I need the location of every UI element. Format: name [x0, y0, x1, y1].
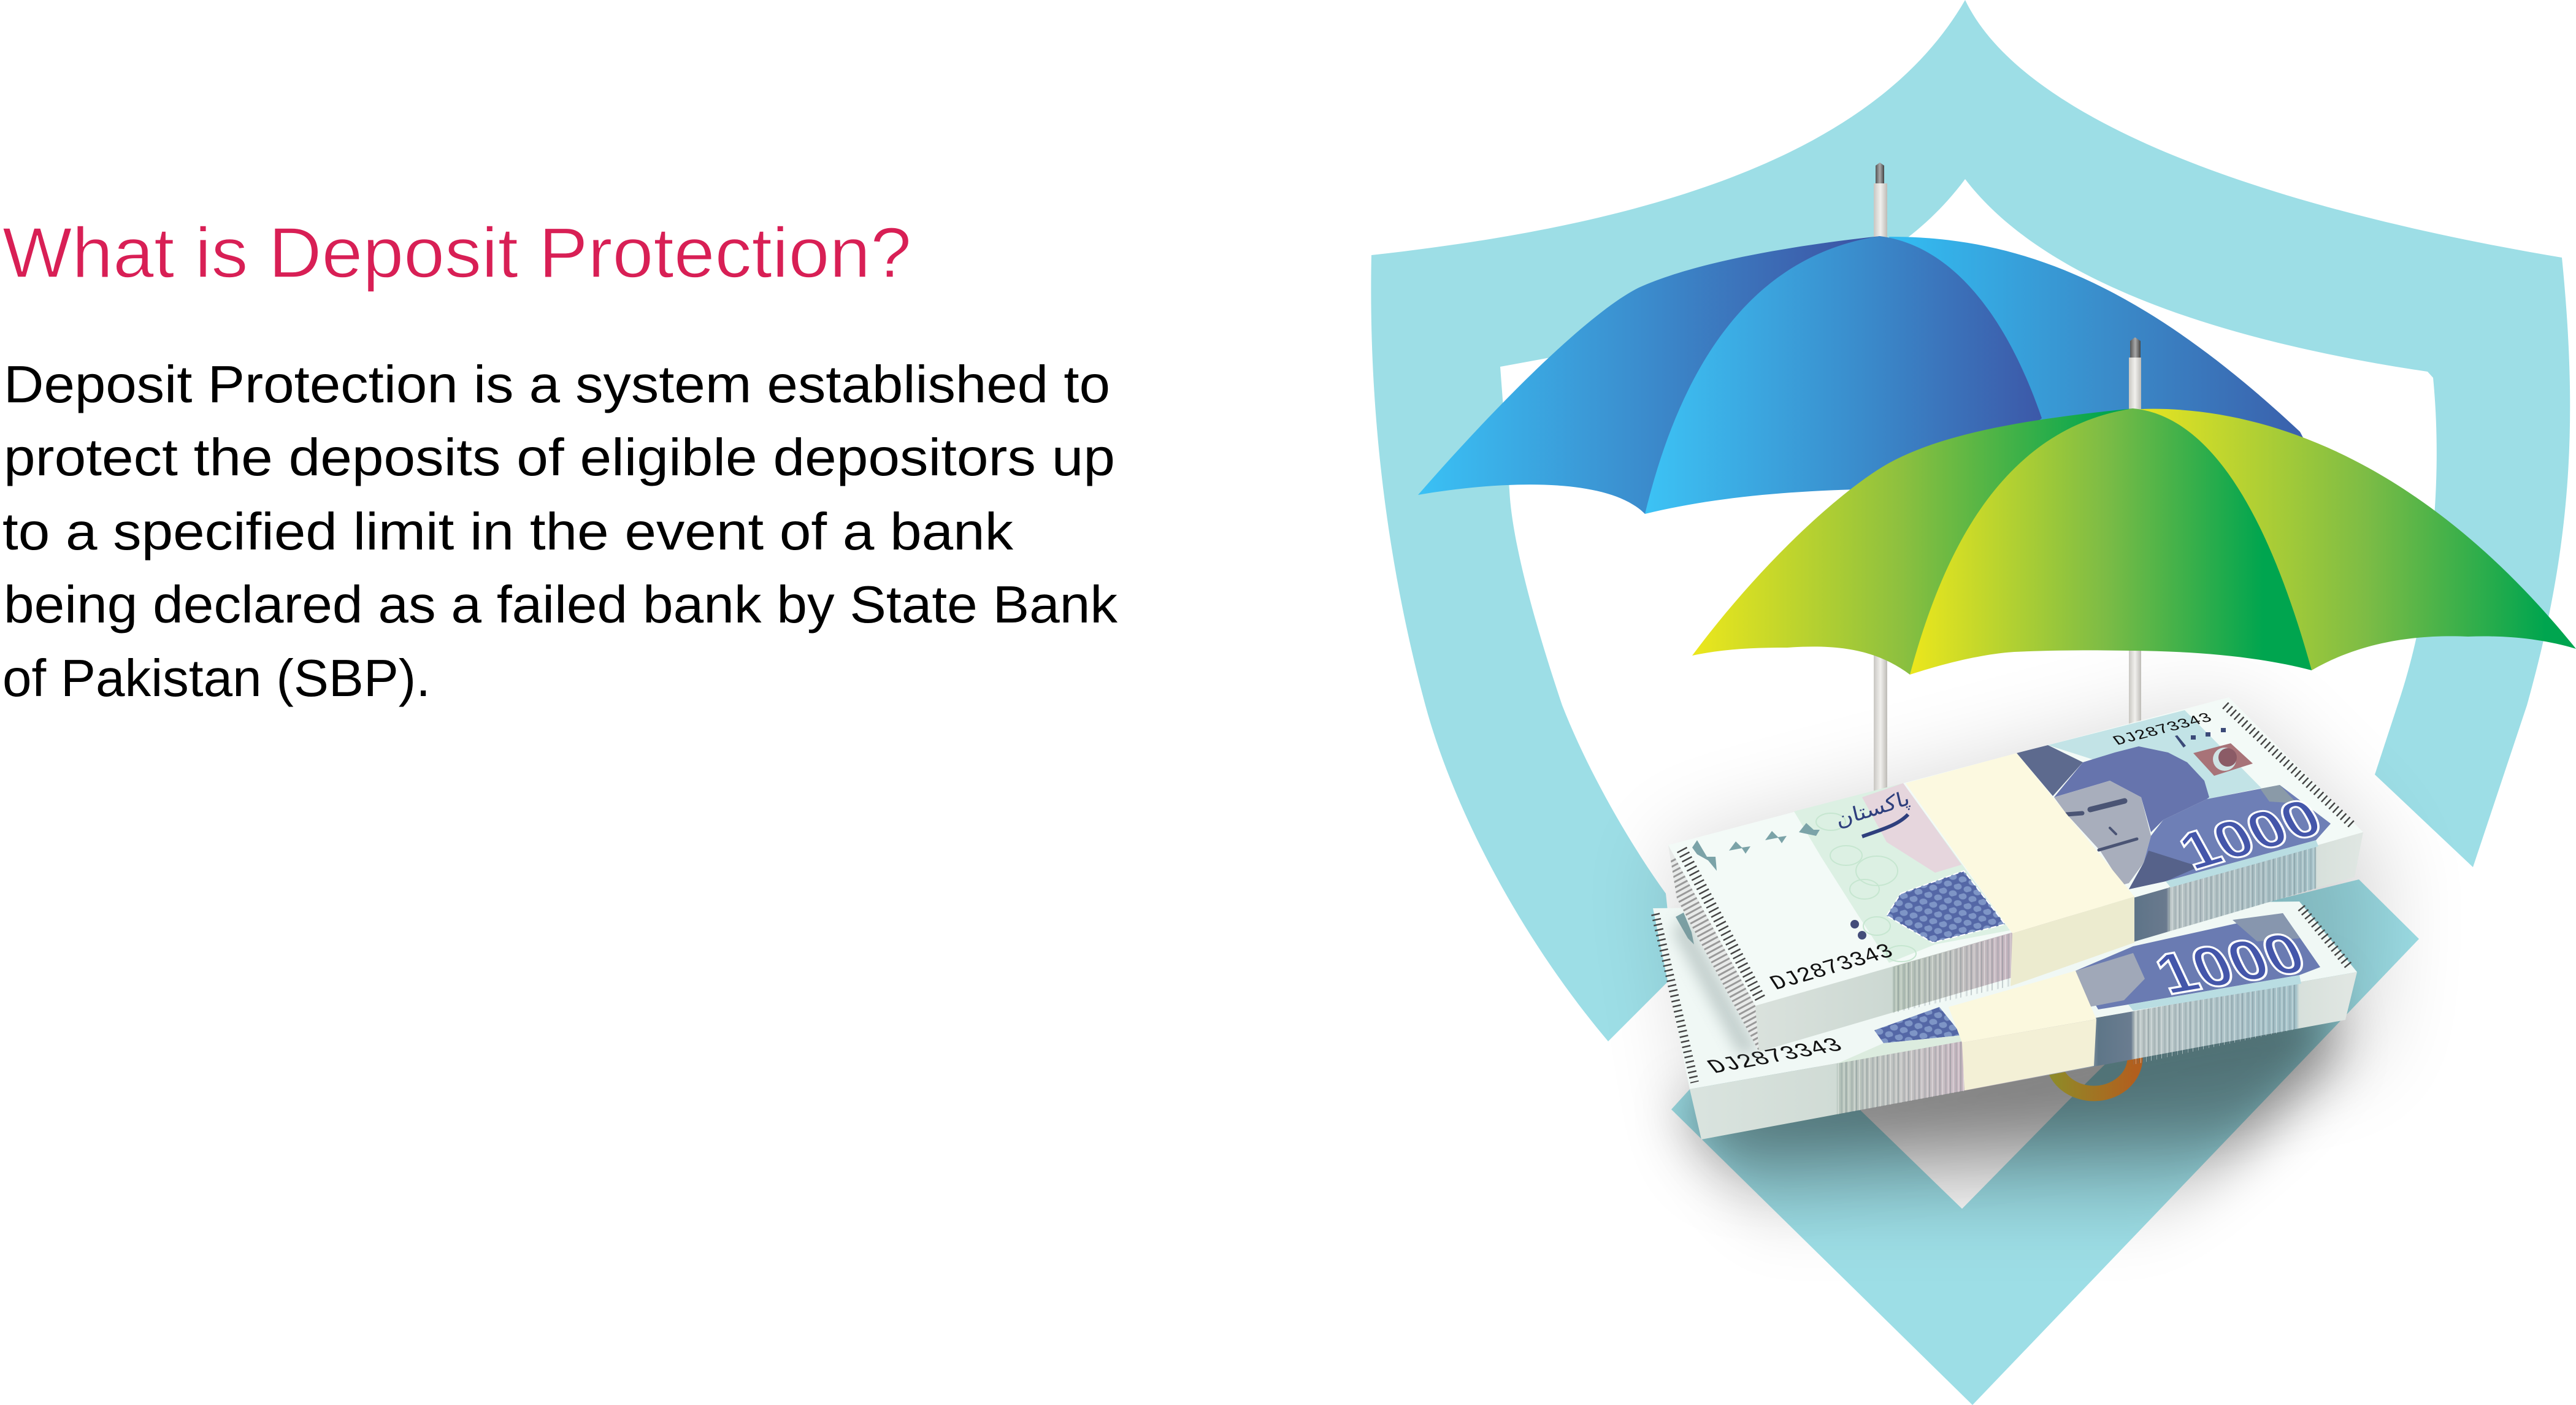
side stripes left [1838, 1041, 1965, 1114]
umbrella: green [1692, 337, 2576, 817]
edge ticks left [1682, 849, 1761, 1001]
heading: What is Deposit Protection?: What is Deposit Protection? [2, 213, 911, 293]
front side [1755, 832, 2363, 1052]
blue pattern [1874, 1007, 1962, 1043]
portrait fragment [2076, 953, 2145, 1007]
body paragraph [2, 356, 1118, 708]
cyan strip [2166, 840, 2318, 887]
pale guilloche [1838, 1035, 1962, 1063]
pale green guilloche [1794, 783, 2010, 963]
serial number right: DJ2873343 [2110, 711, 2216, 749]
pink centre [1862, 783, 1961, 873]
flag [2193, 743, 2253, 776]
paper band top [1906, 753, 2134, 933]
guilloche rings [1816, 813, 1916, 962]
body paragraph: Deposit Protection is a system established to [4, 356, 1110, 414]
urdu script: پاکستان [1834, 786, 1912, 832]
edge ticks left [1655, 914, 1695, 1082]
money: top stack [1663, 697, 2363, 1055]
body paragraph: to a specified limit in the event of a bank [2, 503, 1014, 561]
body paragraph: protect the deposits of eligible depositors up [4, 429, 1115, 487]
edge ticks right [2225, 705, 2354, 827]
umbrella: blue [1418, 163, 2331, 876]
side stripes left [1893, 933, 2012, 1013]
cyan strip [2128, 975, 2301, 1011]
side stripes right [2168, 846, 2316, 932]
flag crescent [2213, 748, 2236, 771]
watermark numerals [1692, 823, 1820, 871]
paper band side [1962, 1019, 2096, 1090]
dark engraved neck [2129, 851, 2199, 889]
pole [1874, 183, 1887, 876]
engraved blue panel [2129, 785, 2331, 889]
portrait features [2066, 801, 2137, 850]
left edge hatching [1671, 859, 1759, 1050]
pole [2129, 358, 2141, 817]
left panel [1692, 408, 2133, 675]
body paragraph: of Pakistan (SBP). [2, 649, 431, 708]
number 1000: 1000 [2168, 787, 2333, 881]
front side [1690, 972, 2357, 1139]
side stripes right [2133, 982, 2297, 1065]
number 1000: 1000 [2145, 920, 2315, 1006]
soft halo around money [1668, 705, 2380, 1165]
dark shadow under money [1681, 981, 2337, 1251]
watermark mark [1676, 913, 1694, 944]
edge ticks right [2301, 908, 2350, 967]
middle panel [1645, 236, 2042, 514]
left panel [1418, 236, 1880, 514]
serial number: DJ2873343 [1703, 1035, 1849, 1079]
blue note engraving [2076, 913, 2320, 1009]
light blue note corner [2048, 710, 2261, 799]
body paragraph: being declared as a failed bank by State Bank [4, 576, 1118, 634]
dots [1850, 920, 1859, 928]
portrait face [2054, 781, 2151, 885]
paper band top [1949, 971, 2096, 1043]
right panel [2141, 409, 2576, 670]
pole tip [2130, 337, 2141, 358]
money stack shadow [1668, 705, 2380, 1251]
urdu swoosh [1862, 814, 1908, 836]
hat [2054, 746, 2209, 832]
right panel [1889, 237, 2331, 613]
pole tip [1876, 163, 1884, 183]
dark coat [2017, 745, 2083, 796]
denomination marks [2175, 728, 2226, 748]
paper band side [2011, 897, 2134, 986]
grey note corner [2260, 785, 2297, 803]
shield illustration [1371, 0, 2570, 1405]
shield: main body [1371, 0, 2570, 1041]
serial number left: DJ2873343 [1766, 940, 1899, 996]
top face [1668, 697, 2363, 1006]
icon: coin [2053, 1022, 2135, 1093]
money: bottom stack [1653, 902, 2357, 1139]
top face [1653, 902, 2357, 1089]
middle panel [1910, 408, 2312, 675]
blue rosette pattern [1887, 871, 2005, 943]
grey note corner [2233, 913, 2300, 941]
shield: bottom chevron [1671, 879, 2419, 1405]
left edge [1668, 845, 1759, 1052]
shadow cast by top stack [1673, 914, 1759, 1055]
